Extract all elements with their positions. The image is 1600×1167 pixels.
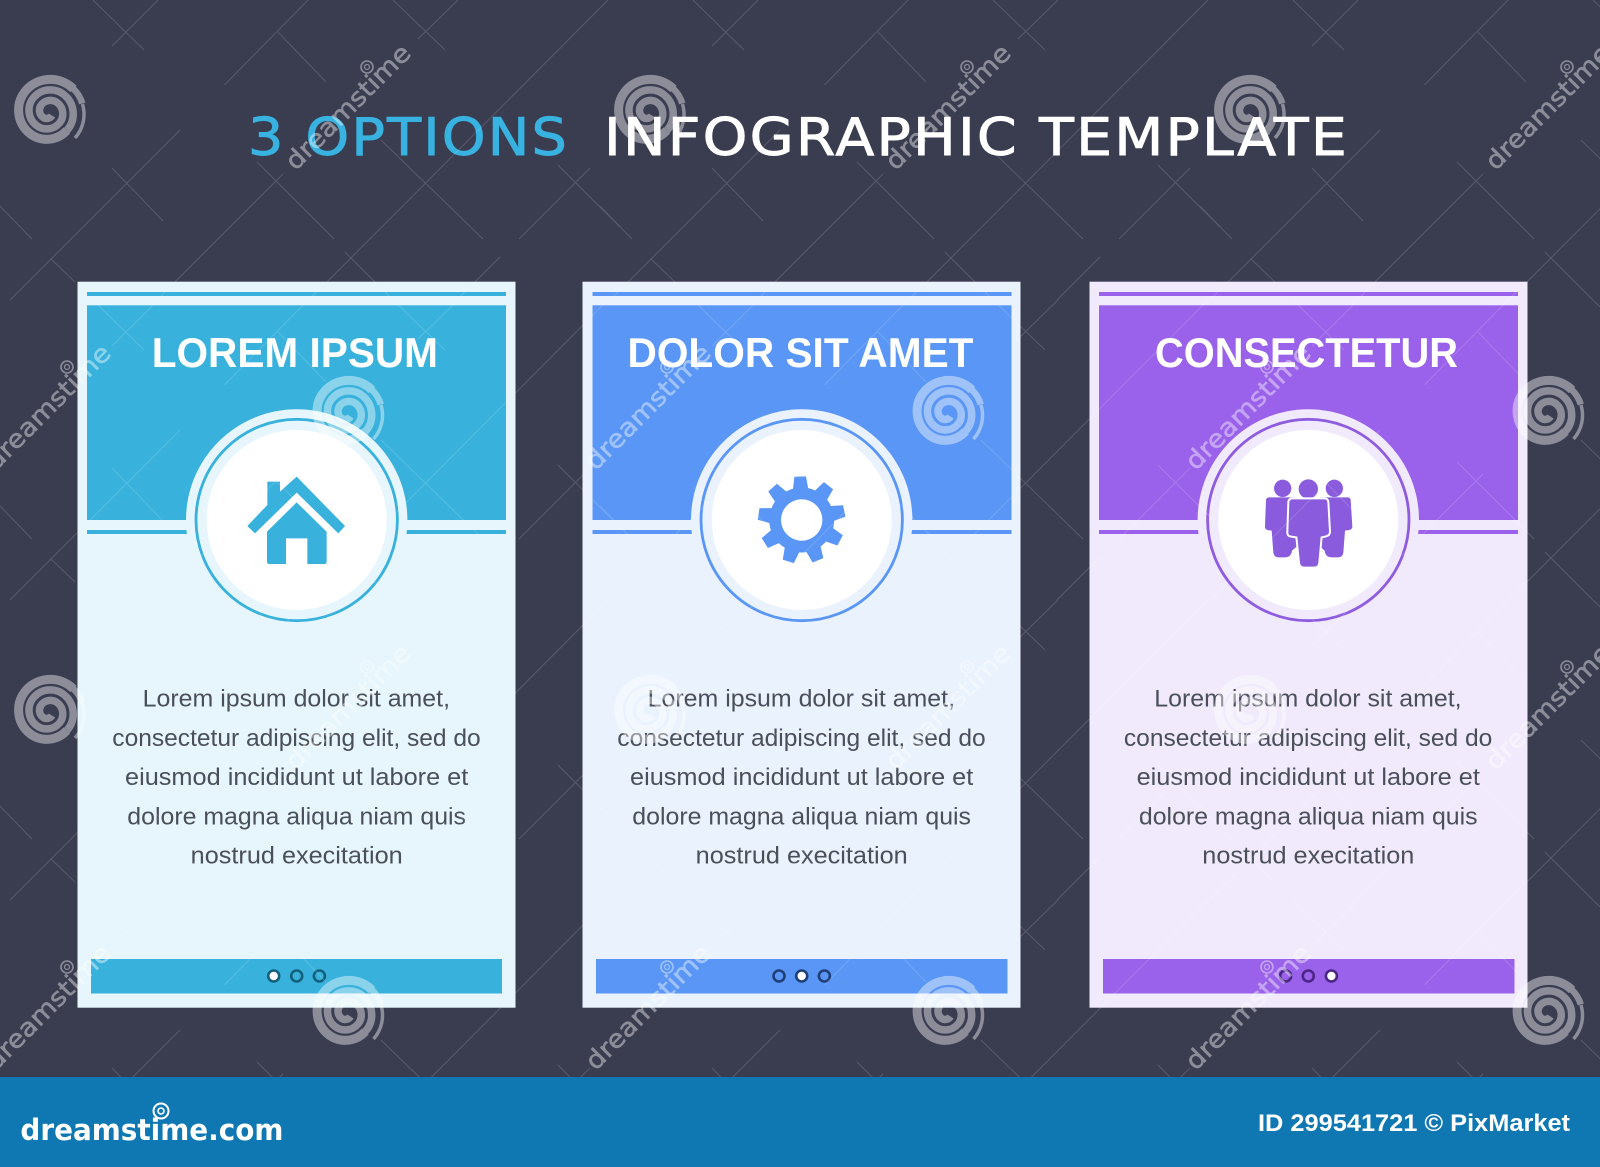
- source band: [0, 1077, 1600, 1167]
- body text: Lorem ipsum dolor sit amet,: [143, 686, 450, 713]
- card background: [78, 282, 516, 1008]
- header band: [592, 305, 1012, 520]
- icon: gear: [758, 476, 846, 564]
- heading: CONSECTETUR: [1155, 329, 1458, 376]
- panel: dolor sit amet: [582, 282, 1020, 1008]
- body text: dolore magna aliqua niam quis: [632, 803, 971, 830]
- top rule: [87, 292, 506, 296]
- footer bar with dots: [91, 959, 502, 994]
- icon badge: house: [186, 409, 407, 631]
- panel: consectetur: [1090, 282, 1528, 1008]
- body text: nostrud execitation: [191, 842, 403, 869]
- body text: eiusmod incididunt ut labore et: [1137, 764, 1480, 791]
- title: 3 OPTIONS: [248, 108, 569, 168]
- top rule: [592, 292, 1012, 296]
- body text: consectetur adipiscing elit, sed do: [1124, 725, 1492, 752]
- title: INFOGRAPHIC TEMPLATE: [604, 108, 1349, 168]
- lower rule: [87, 530, 506, 534]
- panel: lorem ipsum: [78, 282, 516, 1008]
- body text: consectetur adipiscing elit, sed do: [617, 725, 986, 752]
- footer bar with dots: [1103, 959, 1514, 994]
- footer bar with dots: [596, 959, 1008, 994]
- card background: [582, 282, 1020, 1008]
- body text: Lorem ipsum dolor sit amet,: [648, 686, 955, 713]
- icon badge: gear: [691, 409, 912, 631]
- heading: LOREM IPSUM: [152, 329, 438, 376]
- top rule: [1099, 292, 1518, 296]
- icon: house: [247, 477, 345, 564]
- body text: nostrud execitation: [696, 842, 908, 869]
- body text: [617, 686, 986, 869]
- body text: [1124, 686, 1492, 869]
- body text: dolore magna aliqua niam quis: [1139, 803, 1478, 830]
- body text: eiusmod incididunt ut labore et: [125, 764, 469, 791]
- body text: eiusmod incididunt ut labore et: [630, 764, 974, 791]
- lower rule: [592, 530, 1012, 534]
- body text: [112, 686, 481, 869]
- image id and credit: ID 299541721 © PixMarket: [1258, 1110, 1570, 1137]
- body text: Lorem ipsum dolor sit amet,: [1154, 686, 1462, 713]
- lower rule: [1099, 530, 1518, 534]
- body text: dolore magna aliqua niam quis: [127, 803, 466, 830]
- icon: people: [1265, 479, 1352, 567]
- header band: [87, 305, 506, 520]
- source logo: dreamstime.com: [20, 1113, 283, 1147]
- body text: consectetur adipiscing elit, sed do: [112, 725, 481, 752]
- icon badge: people: [1198, 409, 1419, 631]
- body text: nostrud execitation: [1202, 842, 1414, 869]
- header band: [1099, 305, 1518, 520]
- heading: DOLOR SIT AMET: [628, 329, 974, 376]
- title: [248, 108, 1349, 168]
- card background: [1090, 282, 1528, 1008]
